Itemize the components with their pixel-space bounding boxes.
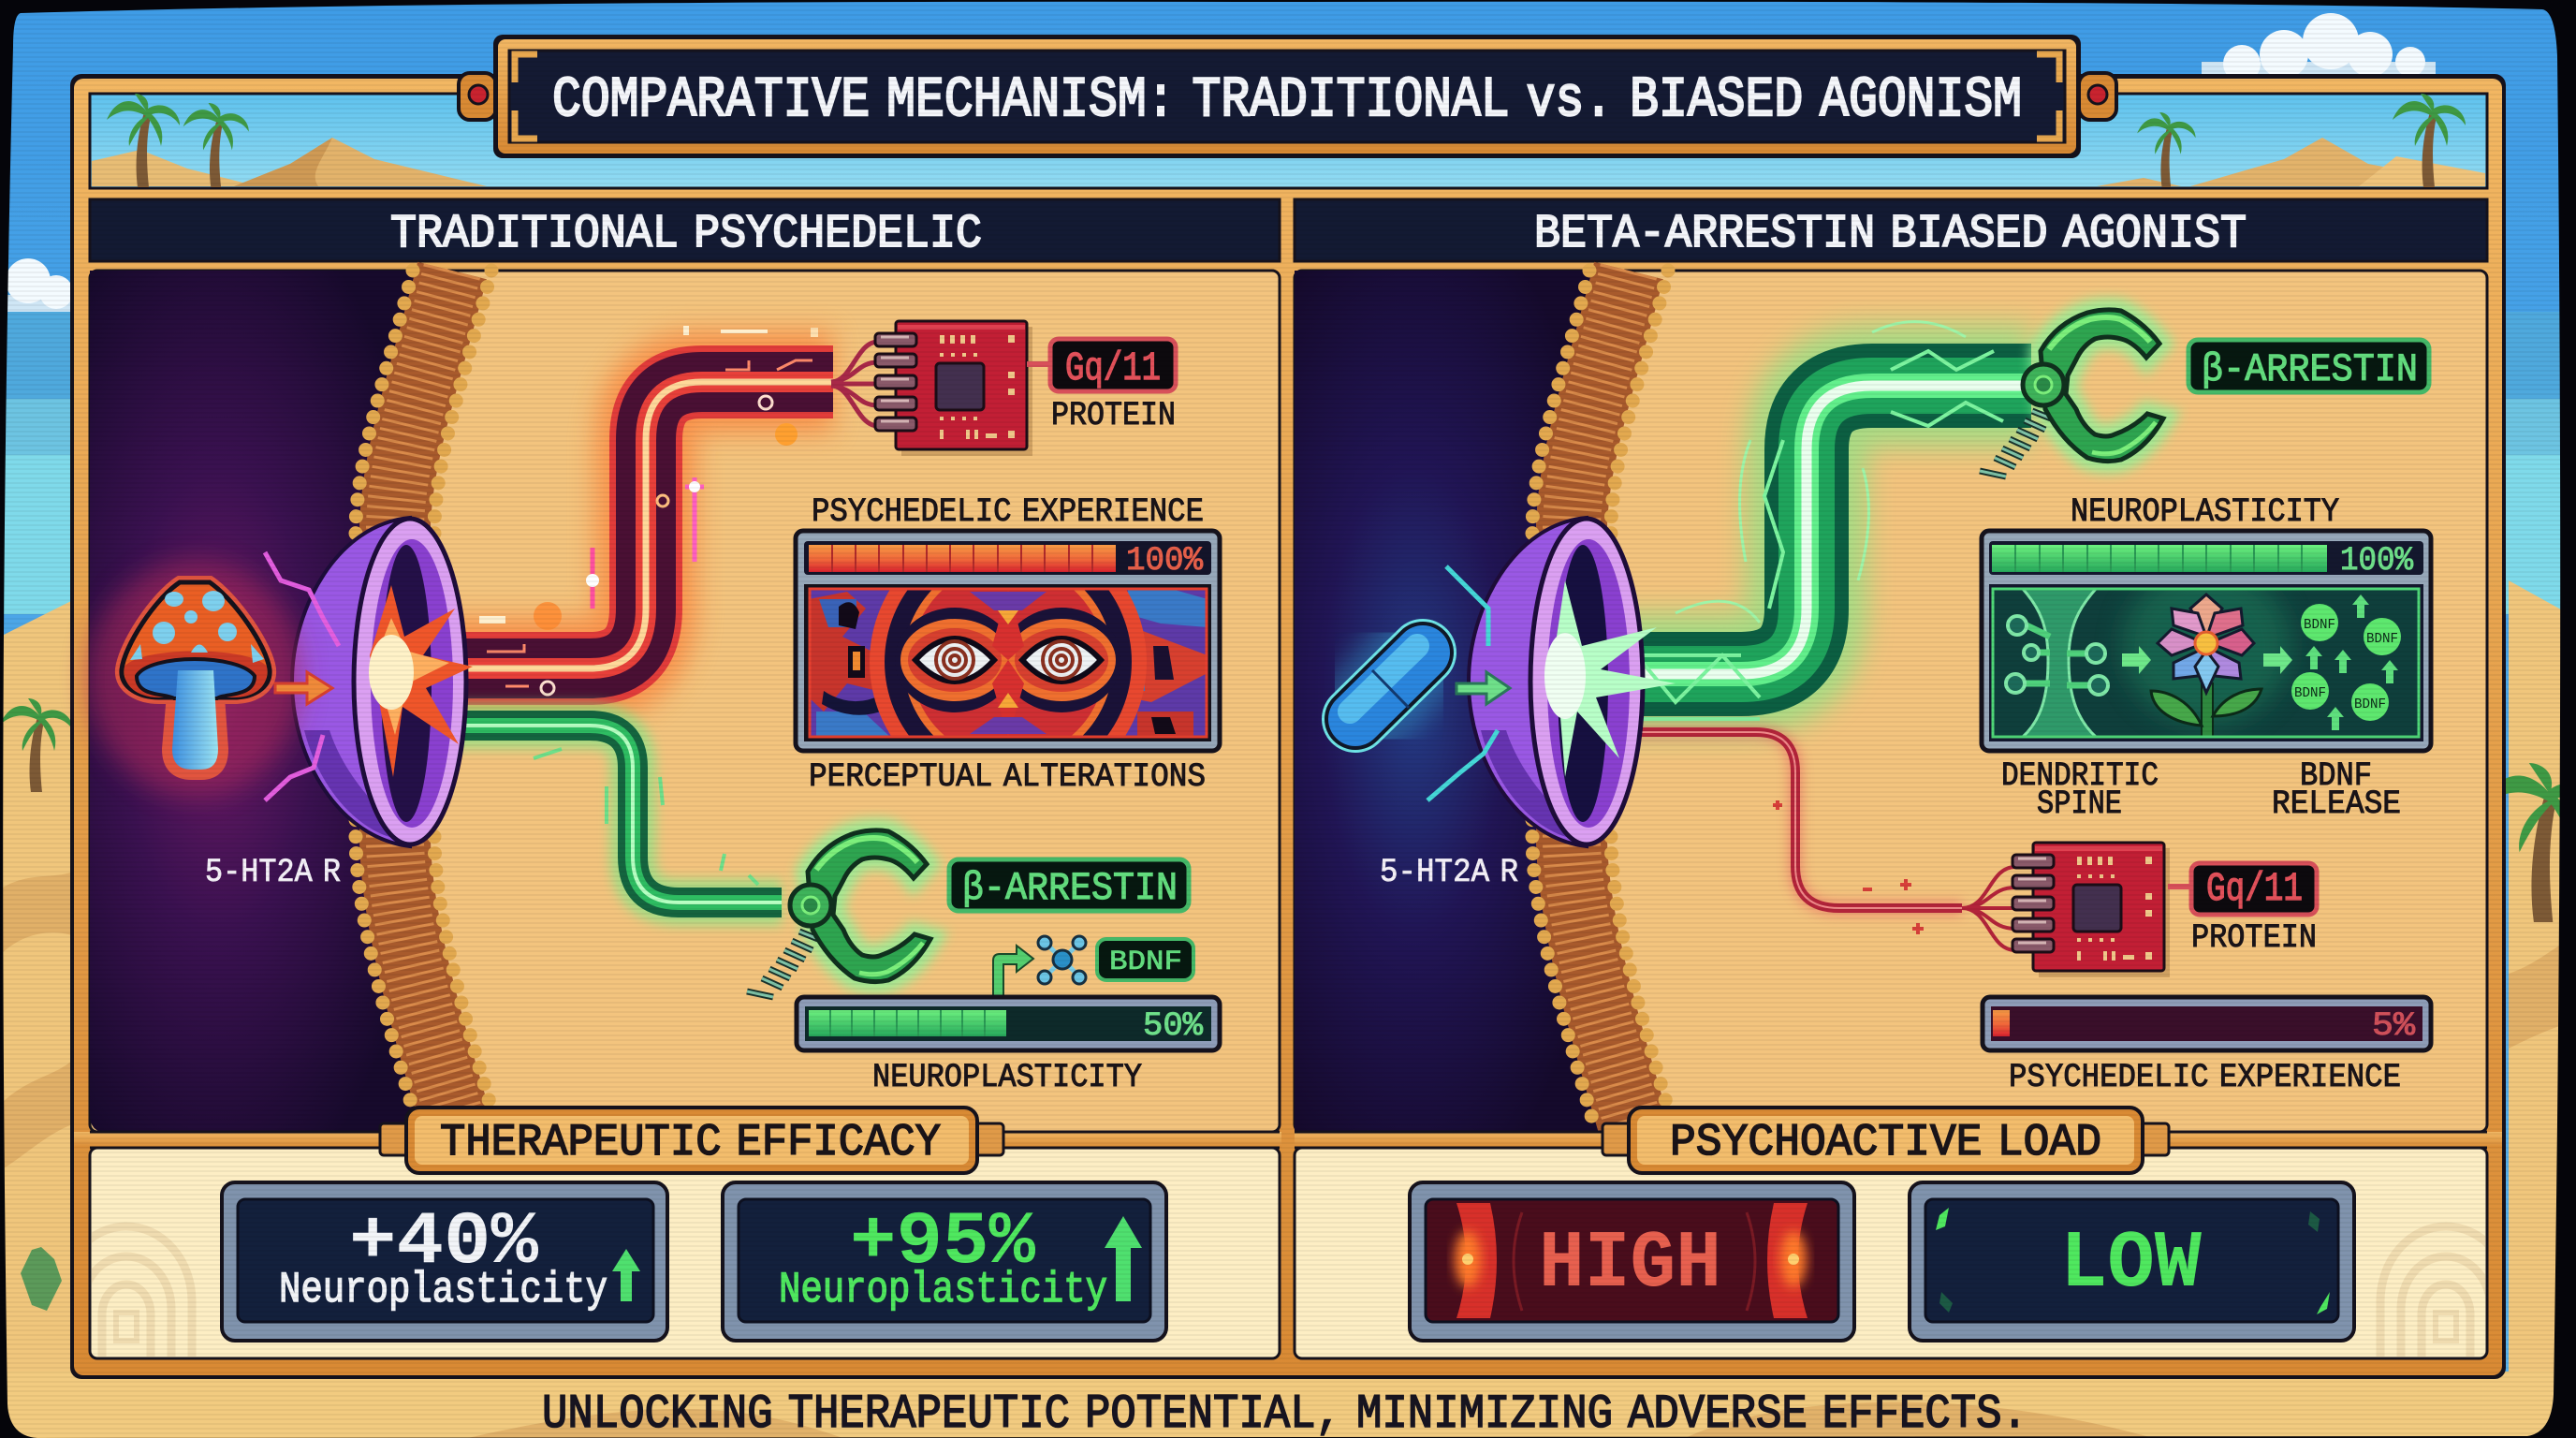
icon: burst: [369, 585, 473, 777]
dendritic spine label: DENDRITIC: [2001, 757, 2159, 795]
protein label: PROTEIN: [1051, 397, 1176, 434]
beta-arrestin label: β-ARRESTIN: [2202, 347, 2418, 392]
sky strip scenery: dunes and palms: [92, 94, 2485, 187]
bdnf release label: RELEASE: [2272, 785, 2401, 823]
icon: bdnf molecule: [1038, 936, 1086, 984]
neuroplasticity meter 50 percent: 50%: [1143, 1007, 1204, 1045]
neuroplasticity meter and visual: BDNF: [2354, 697, 2386, 712]
dendritic spine label: SPINE: [2037, 785, 2122, 823]
icon: mushroom: [87, 562, 302, 796]
card: +95 percent neuroplasticity: [723, 1182, 1166, 1341]
panel: therapeutic efficacy: [74, 1106, 1281, 1359]
heading: traditional psychedelic: TRADITIONAL PSYCHEDELIC: [390, 208, 982, 261]
plate: psychoactive load: [1603, 1108, 2169, 1173]
bdnf release label: [2272, 757, 2401, 823]
title text: COMPARATIVE MECHANISM: TRADITIONAL vs. BIASED AGONISM: [552, 69, 2022, 133]
neuroplasticity meter and visual: BDNF: [2304, 617, 2335, 633]
plate: psychoactive load: PSYCHOACTIVE LOAD: [1670, 1118, 2101, 1168]
receptor label: 5-HT2A R: [1380, 854, 1518, 891]
dendritic spine label: [2001, 757, 2159, 823]
experience meter and visual: [794, 528, 1222, 753]
panel: psychoactive load: [1294, 1106, 2502, 1359]
protein label: PROTEIN: [2191, 919, 2317, 957]
neuroplasticity meter and visual: BDNF: [2294, 685, 2326, 701]
neuroplasticity label: NEUROPLASTICITY: [872, 1059, 1142, 1096]
panel: traditional psychedelic pathway: [87, 271, 1280, 1132]
beta-arrestin label: β-ARRESTIN: [962, 866, 1178, 911]
psychedelic experience label: PSYCHEDELIC EXPERIENCE: [812, 493, 1204, 531]
icon: gq chip: [2012, 843, 2170, 977]
bdnf label: BDNF: [1109, 946, 1182, 978]
plate: therapeutic efficacy: [380, 1108, 1003, 1173]
card: +95 percent neuroplasticity: Neuroplasticity: [779, 1266, 1107, 1314]
panel: biased agonist pathway: [1295, 271, 2487, 1132]
psychedelic experience meter 5 percent: 5%: [2372, 1007, 2416, 1045]
icon: gq chip: [875, 321, 1032, 456]
perceptual alterations label: PERCEPTUAL ALTERATIONS: [809, 758, 1206, 796]
psychedelic experience meter 5 percent: [1983, 997, 2431, 1050]
card: low load: [1910, 1182, 2354, 1341]
sparks around the red pathway: [479, 326, 818, 630]
beta-arrestin pathway: thin green: [449, 726, 782, 902]
arrow: drug to receptor: [275, 672, 332, 704]
connector and gq label: Gq/11: [2206, 866, 2303, 912]
psychedelic experience label: PSYCHEDELIC EXPERIENCE: [2009, 1059, 2401, 1096]
card: +95 percent neuroplasticity: +95%: [850, 1200, 1036, 1285]
neuroplasticity meter and visual: BDNF: [2366, 631, 2398, 647]
card: high load: [1410, 1182, 1854, 1341]
cell membrane: [356, 271, 498, 1132]
connector and gq label: [2168, 863, 2317, 915]
cloud right: [2202, 13, 2436, 82]
receptor label: 5-HT2A R: [205, 854, 341, 891]
card: low load: LOW: [2060, 1218, 2202, 1310]
icon: receptor: [265, 518, 466, 846]
card: +40 percent neuroplasticity: +40%: [349, 1200, 539, 1285]
icon: receptor: [1427, 518, 1643, 846]
cloud left: [6, 258, 73, 312]
bdnf release label: BDNF: [2300, 757, 2372, 795]
icon: beta-arrestin claw: [747, 830, 930, 997]
icon: green burst: [1544, 580, 1676, 777]
icon: blue pill: [1350, 646, 1423, 719]
experience meter and visual: 100%: [1126, 542, 1204, 580]
heading: beta-arrestin biased agonist: BETA-ARRESTIN BIASED AGONIST: [1534, 208, 2247, 261]
connector and gq label: [1027, 339, 1176, 391]
gq signal pathway: thick red: [431, 342, 878, 695]
connector and gq label: Gq/11: [1065, 345, 1161, 391]
card: +40 percent neuroplasticity: Neuroplasticity: [279, 1266, 607, 1314]
neuroplasticity label: NEUROPLASTICITY: [2071, 493, 2339, 531]
title banner: [459, 35, 2116, 158]
card: +40 percent neuroplasticity: [222, 1182, 667, 1341]
neuroplasticity meter 50 percent: [797, 997, 1220, 1050]
icon: beta-arrestin claw: [1980, 310, 2163, 477]
neuroplasticity meter and visual: [1982, 531, 2431, 751]
arrow: pill to receptor: [1456, 672, 1510, 704]
icon: arrow to bdnf: [993, 946, 1033, 998]
cell membrane: [1532, 271, 1675, 1132]
card: high load: HIGH: [1539, 1218, 1721, 1310]
bdnf label: [1097, 939, 1193, 980]
gq pathway: thin red: [1620, 732, 2015, 950]
plate: therapeutic efficacy: THERAPEUTIC EFFICACY: [440, 1118, 941, 1168]
neuroplasticity meter and visual: 100%: [2340, 542, 2414, 580]
beta-arrestin pathway: thick green: [1591, 322, 2031, 719]
